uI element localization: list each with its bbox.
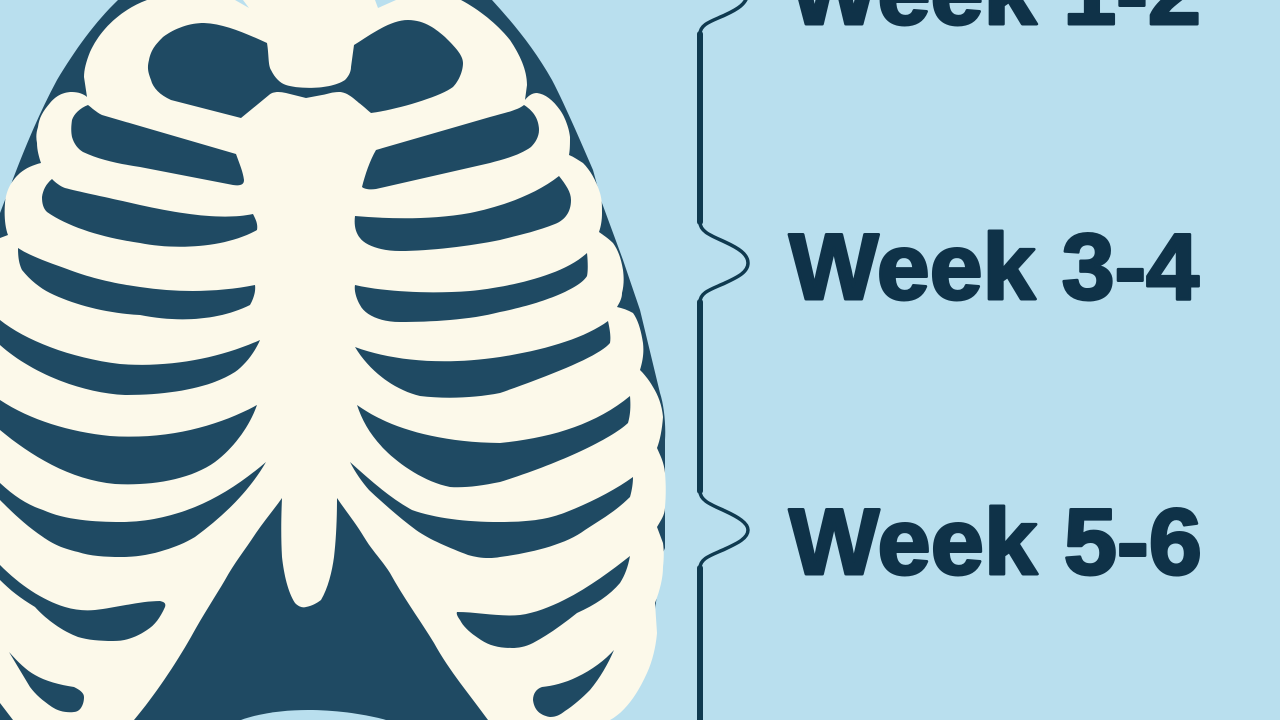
bones	[0, 0, 666, 720]
left gap 6	[0, 462, 266, 557]
left gap 5	[0, 400, 257, 484]
right gap 2	[355, 176, 571, 251]
left rib gaps	[0, 105, 266, 720]
abdominal triangle	[134, 498, 488, 720]
right gap 8	[533, 650, 614, 717]
left gap 7	[0, 565, 165, 641]
illustration: rib cage	[0, 0, 666, 720]
torso silhouette	[0, 0, 665, 720]
left gap 9	[0, 703, 13, 720]
right gap 4	[355, 321, 610, 398]
small background notches at top	[235, 0, 396, 8]
left gap 3	[18, 248, 255, 319]
left gap 2	[42, 179, 257, 247]
left gap 4	[0, 320, 260, 395]
timeline brace	[700, 0, 748, 720]
top gaps beside the neck	[148, 20, 463, 118]
right gap 6	[350, 462, 633, 558]
right gap 7	[457, 556, 630, 648]
diaphragm arc	[241, 710, 386, 720]
label: Week 5-6: Week 5-6	[789, 489, 1202, 594]
label: Week 3-4: Week 3-4	[789, 214, 1199, 319]
left gap 8	[9, 652, 84, 712]
right gap 3	[355, 253, 588, 322]
right gap 1	[362, 105, 539, 189]
right rib gaps	[350, 105, 633, 717]
left gap 1	[71, 105, 244, 185]
right gap 5	[357, 396, 630, 487]
